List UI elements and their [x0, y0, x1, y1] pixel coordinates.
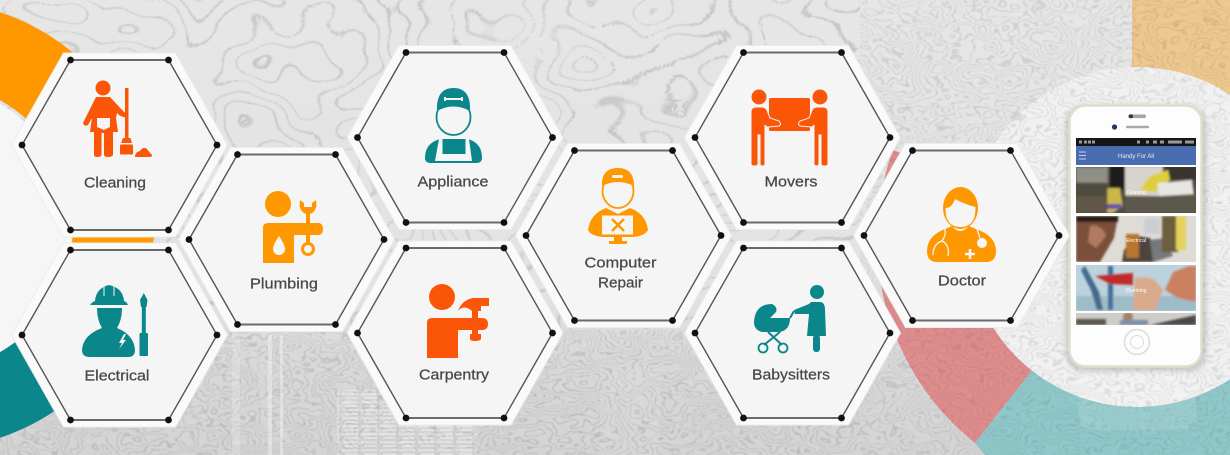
icon: carpenter with hammer	[427, 284, 489, 358]
phone home button	[1124, 330, 1150, 354]
label: Carpentry	[419, 366, 490, 384]
left inner circle	[0, 85, 72, 371]
panel: babysitters	[684, 241, 900, 425]
panel: appliance	[347, 46, 563, 230]
phone header bar: Handy For All	[1118, 154, 1154, 160]
label: Cleaning	[84, 174, 146, 192]
right ring: pink segment	[877, 150, 1137, 443]
phone photo: plumbing	[1076, 265, 1196, 311]
phone shadow	[1066, 106, 1206, 371]
label: Babysitters	[752, 366, 830, 384]
phone photo: cleaning	[1076, 166, 1196, 213]
label: Computer	[584, 254, 657, 272]
icon: computer technician	[588, 168, 648, 244]
left ring: orange segment	[0, 1, 154, 244]
right inner circle	[967, 67, 1230, 407]
panel: doctor	[854, 144, 1070, 328]
phone speaker and camera	[1112, 114, 1149, 130]
icon: doctor with stethoscope	[927, 187, 996, 262]
label: Appliance	[418, 174, 488, 190]
panel: carpentry	[347, 241, 563, 425]
phone status bar	[1076, 138, 1196, 146]
phone photo: partial	[1076, 312, 1196, 325]
icon: appliance technician	[425, 88, 482, 163]
label: Movers	[764, 174, 818, 190]
right ring: teal segment	[975, 237, 1230, 455]
phone header bar	[1076, 146, 1196, 165]
phone reflection	[1078, 370, 1196, 430]
icon: person with stroller	[754, 285, 826, 352]
icon: two movers carrying box	[751, 90, 828, 166]
phone photo: electrical	[1076, 216, 1196, 262]
right map texture	[860, 0, 1230, 455]
panel: movers	[684, 46, 900, 230]
phone photo: electrical: Electrical	[1126, 238, 1146, 244]
label: Doctor	[938, 272, 986, 290]
panel: cleaning	[12, 53, 228, 237]
phone	[1070, 106, 1202, 366]
icon: cleaner with broom	[83, 80, 152, 157]
label: Electrical	[84, 368, 150, 384]
icon: plumber with wrench	[263, 191, 323, 263]
label: Repair	[598, 274, 643, 292]
panel: electrical	[12, 243, 228, 427]
panel: plumbing	[178, 148, 394, 332]
phone photo: plumbing: Plumbing	[1126, 288, 1147, 294]
panel: computer repair	[516, 144, 732, 328]
phone photo: cleaning: Cleaning	[1126, 190, 1146, 196]
phone body	[1070, 106, 1202, 366]
left ring: teal segment	[0, 244, 153, 449]
right ring: tan segment	[1132, 0, 1230, 150]
icon: electrician with screwdriver	[82, 285, 148, 357]
label	[584, 254, 657, 292]
label: Plumbing	[250, 276, 318, 292]
